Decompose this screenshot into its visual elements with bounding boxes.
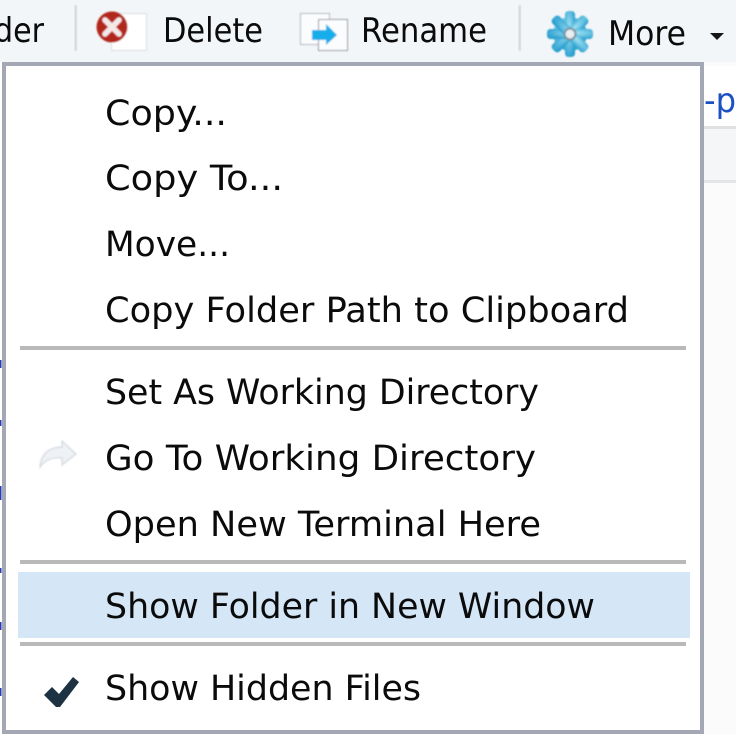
- menu item: move: Move...: [105, 225, 230, 265]
- menu item: copy to: Copy To...: [105, 159, 283, 199]
- icon: dropdown caret: [710, 33, 724, 40]
- icon: delete: [96, 12, 146, 50]
- menu item: show hidden files: Show Hidden Files: [105, 669, 421, 709]
- icon: check mark: [44, 677, 79, 707]
- menu item: open new terminal: Open New Terminal Here: [105, 505, 541, 545]
- menu item: copy folder path: Copy Folder Path to Clipboard: [105, 291, 629, 331]
- menu item: show folder in new window: Show Folder in New Window: [105, 587, 595, 627]
- icon: rename: [300, 14, 348, 50]
- icon: go-to arrow: [40, 441, 76, 467]
- toolbar button: delete label: Delete: [163, 11, 263, 51]
- icon: gear: [547, 11, 593, 57]
- toolbar button: rename label: Rename: [361, 11, 487, 51]
- menu item: set as working directory: Set As Working Directory: [105, 373, 539, 413]
- menu item: go to working directory: Go To Working Directory: [105, 439, 536, 479]
- toolbar button: more label: More: [608, 14, 686, 54]
- menu item: copy: Copy...: [105, 94, 227, 134]
- toolbar: [0, 0, 736, 62]
- highlighted row: [18, 572, 690, 638]
